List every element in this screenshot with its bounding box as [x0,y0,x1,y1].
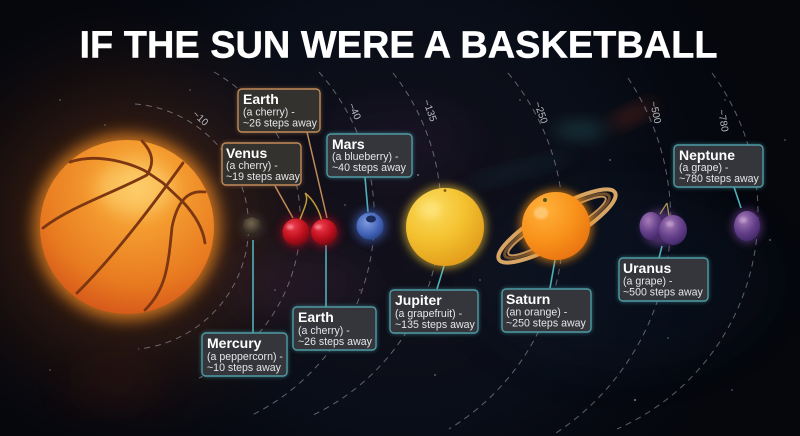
orbit paths [135,72,758,433]
callout: uranus [619,258,708,301]
orbit distance labels [190,98,730,133]
callout: neptune: ~780 steps away [679,173,760,185]
callout: venus [222,143,301,185]
title: IF THE SUN WERE A BASKETBALL [80,24,718,66]
icon: jupiter grapefruit [403,185,487,269]
callout: venus: Venus [226,145,267,161]
icon: uranus grapes [640,203,687,246]
callout: venus: ~19 steps away [226,171,301,183]
icon: mars blueberry [353,209,387,243]
callout: jupiter [390,290,478,333]
callout: neptune: Neptune [679,147,735,163]
orbit distance labels: ~10 [190,109,210,129]
icon: cherries [280,193,340,248]
icon: basketball sun [34,134,220,320]
callout: mars: ~40 steps away [332,162,407,174]
callout: jupiter: Jupiter [395,292,442,308]
callout: jupiter: (a grapefruit) - [395,308,463,320]
callout: mars [327,134,412,177]
callout: earth teal [293,307,376,350]
callout: neptune: (a grape) - [679,162,729,174]
callout: uranus: ~500 steps away [623,286,704,298]
callout: earth orange: ~26 steps away [243,118,318,130]
callout: saturn: Saturn [506,291,550,307]
icon: mercury peppercorn [240,214,264,238]
callout: saturn [502,289,591,332]
callout: mars: Mars [332,136,365,152]
callout: jupiter: ~135 steps away [395,319,476,331]
callout: earth teal: Earth [298,309,334,325]
callout: saturn: (an orange) - [506,306,568,318]
callout: uranus: Uranus [623,260,671,276]
leader lines [253,132,741,333]
callout: earth teal: ~26 steps away [298,336,373,348]
callout: neptune [674,145,763,187]
callout: mercury: ~10 steps away [207,362,282,374]
callout: saturn: ~250 steps away [506,318,587,330]
callout: mercury [202,333,287,376]
callout: earth teal: (a cherry) - [298,325,350,337]
callout: venus: (a cherry) - [226,160,278,172]
callout: earth orange: Earth [243,91,279,107]
callout: earth orange: (a cherry) - [243,106,295,118]
icon: neptune grape [732,209,762,243]
icon: saturn orange with ring [490,178,624,274]
orbit distance labels: ~500 [647,100,663,125]
orbit distance labels: ~40 [345,102,363,122]
orbit distance labels: ~250 [531,100,549,126]
orbit distance labels: ~780 [715,109,730,133]
callout: uranus: (a grape) - [623,276,673,288]
callout: mercury: (a peppercorn) - [207,351,283,363]
callout: mercury: Mercury [207,335,262,351]
callout: earth orange [238,89,320,132]
callout: mars: (a blueberry) - [332,151,399,163]
orbit distance labels: ~135 [420,98,438,124]
